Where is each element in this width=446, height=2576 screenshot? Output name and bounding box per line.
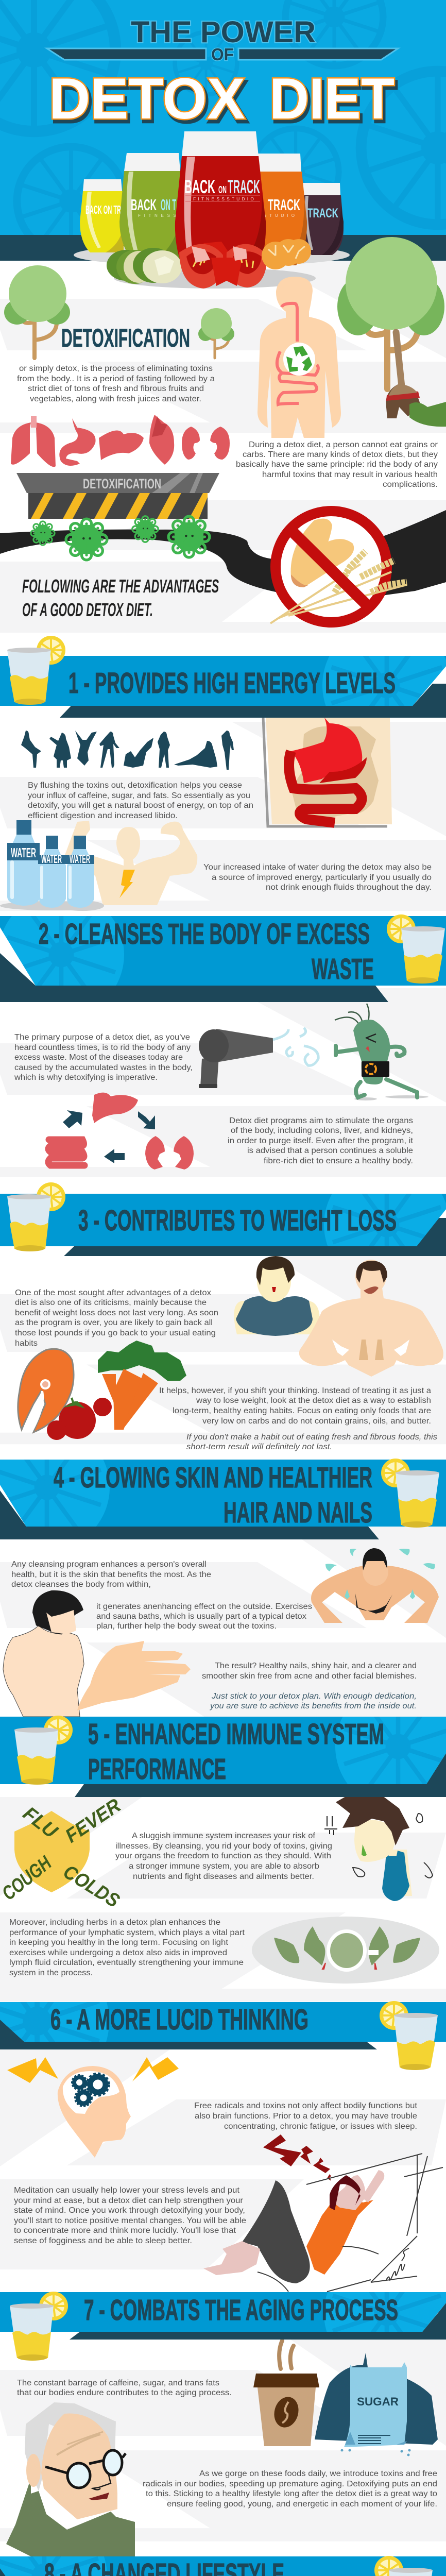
icon: left tree — [4, 265, 70, 358]
icon: recycle — [286, 346, 312, 372]
glass: red: BACK — [184, 176, 215, 197]
text: meditation: your mind at ease, but a detox diet can help strengthen your — [14, 2196, 243, 2205]
panel: section 3 content — [15, 1256, 443, 1451]
text: detox rules: During a detox diet, a person cannot eat grains or — [249, 440, 438, 449]
text: shift thinking: way to lose weight, look at the detox diet as a way to establish — [196, 1396, 431, 1405]
icon: broom — [386, 332, 446, 427]
icon: hand and nails — [77, 1641, 191, 1710]
text: flu fever cough colds: FEVER — [62, 1794, 125, 1847]
text: organs: in order to purge itself. Even after the program, it — [228, 1137, 414, 1145]
icon: healthy back and hair — [3, 1590, 84, 1717]
icon: germ — [335, 1004, 428, 1100]
text: immune system: a stronger immune system, you are able to absorb — [129, 1862, 319, 1871]
banner: 4 glowing skin — [0, 1459, 446, 1539]
text: excess waste — [14, 1033, 193, 1082]
icon: coffee cup — [253, 2341, 319, 2446]
icon: digestive panel — [263, 718, 392, 826]
text: stick to plan: Just stick to your detox plan. With enough dedication, — [211, 1692, 417, 1701]
text: detox rules: carbs. There are many kinds of detox diets, but they — [243, 450, 438, 459]
text: barrage — [17, 2379, 232, 2397]
icon: big tree — [337, 237, 444, 389]
text: water intake: a source of improved energy, particularly if you usually do — [212, 873, 432, 882]
text: herbs: exercises while undergoing a detox also aids in improved — [9, 1948, 227, 1957]
title: detox diet — [49, 66, 397, 134]
text: definition: from the body.. It is a period of fasting followed by a — [17, 375, 215, 383]
food: tomato halves — [179, 242, 267, 289]
text: organs: fibre-rich diet to ensure a healthy body. — [264, 1157, 413, 1165]
text: water intake: not drink enough fluids throughout the day. — [266, 883, 432, 892]
text: short-term result: If you don't make a habit out of eating fresh and fibrous foods, this — [186, 1433, 437, 1442]
text: immune system: A sluggish immune system increases your risk of — [132, 1832, 316, 1840]
icon: silhouettes — [21, 731, 234, 770]
icon: herbal tea — [252, 1917, 439, 1984]
glass: red: ON — [218, 184, 227, 196]
food: orange slices — [262, 239, 311, 269]
heading: detoxification: DETOXIFICATION — [61, 324, 190, 352]
text: exercises and sauna — [96, 1602, 312, 1631]
text: excess waste: which is why detoxifying is imperative. — [14, 1073, 158, 1082]
icon: muscular man — [299, 1260, 443, 1377]
glass: purple: TRACK — [307, 206, 338, 221]
text: free radicals: also brain functions. Prior to a detox, you may have trouble — [195, 2112, 417, 2121]
text: stick to plan: you are sure to achieve its benefits from the inside out. — [210, 1702, 417, 1710]
text: weight loss: habits — [15, 1339, 38, 1348]
icon: small tree — [198, 308, 234, 358]
text: herbs: Moreover, including herbs in a detox plan enhances the — [9, 1918, 220, 1927]
plate shadows — [74, 244, 350, 289]
icon: old man — [6, 2402, 135, 2556]
icon: relaxed woman — [203, 2154, 443, 2292]
banner: 1 high energy — [0, 636, 446, 718]
glass: orange: S T U D I O — [264, 213, 295, 218]
panel: header — [0, 0, 446, 289]
panel: detoxification intro — [0, 237, 446, 623]
icon: water bottles: WATER — [41, 853, 62, 866]
icon: hair dryer — [199, 1029, 273, 1088]
glass: green: F I T N E S S — [138, 213, 176, 218]
icon: liver — [92, 1093, 138, 1123]
text: stick to plan — [210, 1692, 417, 1710]
panel: section 4 content — [3, 1548, 439, 1717]
icon: sugar bag: SUGAR — [357, 2395, 399, 2408]
icon: sugar bag — [315, 2353, 438, 2456]
text: water intake: Your increased intake of water during the detox may also be — [203, 863, 432, 872]
banner: 2 cleanses: WASTE — [312, 953, 374, 986]
text: organs: is advised that a person continues a soluble — [247, 1146, 413, 1155]
icon: colon — [48, 1140, 84, 1165]
text: organs: of the body, including colons, liver, and kidneys, — [231, 1126, 413, 1135]
text: results: smoother skin free from acne and other facial blemishes. — [202, 1672, 417, 1681]
text: barrage: The constant barrage of caffeine, sugar, and trans fats — [17, 2379, 219, 2387]
text: meditation: state of mind. Once you work through detoxifying your body, — [14, 2206, 245, 2215]
icon: shield — [14, 1811, 90, 1892]
text: weight loss: as the program is over, you are likely to gain back all — [15, 1318, 213, 1327]
panel: section 5 content — [0, 1793, 439, 1984]
text: flu fever cough colds: COLDS — [59, 1861, 123, 1912]
text: flushing toxins: your influx of caffeine, sugar, and fats. So essentially as you — [28, 791, 250, 800]
text: skin benefits: Any cleansing program enhances a person's overall — [11, 1560, 207, 1569]
banner: 5 immune system — [0, 1716, 446, 1797]
title: the power of — [47, 15, 398, 64]
glass: red: TRACK — [228, 176, 260, 197]
text: weight loss: One of the most sought after advantages of a detox — [15, 1289, 211, 1297]
text: advantages: FOLLOWING ARE THE ADVANTAGES — [22, 575, 219, 597]
text: excess waste: excess waste. Most of the diseases today are — [14, 1053, 183, 1062]
text: advantages — [22, 575, 219, 620]
text: meditation: Meditation can usually help lower your stress levels and put — [14, 2186, 240, 2195]
text: flu fever cough colds — [0, 1794, 125, 1912]
text: excess waste: caused by the accumulated wastes in the body, — [14, 1063, 193, 1072]
text: results: The result? Healthy nails, shiny hair, and a clearer and — [215, 1662, 417, 1670]
text: flu fever cough colds: FLU — [19, 1803, 62, 1843]
panel: section 6 content — [7, 2057, 443, 2292]
banner: 6 lucid thinking: 6 - A MORE LUCID THINKING — [50, 2003, 308, 2036]
glass: green: BACK — [131, 196, 157, 214]
text: herbs: system in the process. — [9, 1969, 93, 1977]
text: skin benefits — [11, 1560, 211, 1589]
text: water intake — [203, 863, 432, 892]
icon: no bread and grains — [270, 511, 407, 623]
glass: green: ON T — [161, 196, 176, 214]
icon: lightning bolts — [7, 2057, 179, 2083]
text: free radicals — [194, 2102, 418, 2131]
text: weight loss: benefit of weight loss does not last very long. As soon — [15, 1309, 218, 1317]
panel: section 2 content — [14, 1004, 428, 1170]
icon: viruses — [33, 518, 206, 556]
text: immune system: your organs the freedom to function as they should. With — [115, 1852, 331, 1860]
icon: digestive body — [258, 277, 341, 438]
icon: kidneys — [145, 1136, 194, 1170]
icon: water bottles: WATER — [70, 853, 90, 866]
glass: yellow: BACK ON TR — [85, 203, 121, 216]
text: flushing toxins — [28, 781, 253, 820]
text: exercises and sauna: and sauna baths, which is usually part of a typical detox — [96, 1612, 306, 1621]
text: shift thinking: long-term, healthy eating habits. Focus on eating only foods that are — [173, 1406, 431, 1415]
text: free radicals: concentrating, chronic fatigue, or issues with sleep. — [224, 2122, 417, 2131]
text: weight loss: diet is also one of its criticisms, mainly because the — [15, 1298, 207, 1307]
text: herbs: in keeping you healthy in the long term. Focusing on light — [9, 1938, 229, 1947]
panel: section 7 content — [6, 2341, 438, 2556]
panel: section 1 content — [0, 718, 432, 911]
title: detox diet: DETOX — [49, 66, 245, 131]
glass: orange — [258, 154, 307, 265]
text: advantages: OF A GOOD DETOX DIET. — [22, 599, 153, 620]
text: definition: vegetables, along with fresh juices and water. — [30, 395, 201, 403]
text: gorge: As we gorge on these foods daily, we introduce toxins and free — [199, 2469, 437, 2478]
text: weight loss — [15, 1289, 218, 1348]
text: immune system: illnesses. By cleansing, you rid your body of toxins, giving — [115, 1842, 332, 1851]
text: free radicals: Free radicals and toxins not only affect bodily functions but — [194, 2102, 418, 2110]
text: exercises and sauna: plan, further help the body sweat out the toxins. — [96, 1622, 277, 1631]
text: meditation — [14, 2186, 246, 2245]
icon: overweight man — [234, 1256, 320, 1336]
title: the power of: THE POWER — [131, 15, 316, 49]
text: herbs: lymph fluid circulation, eventually strengthening your immune — [9, 1958, 244, 1967]
text: skin benefits: detox cleanses the body from within, — [11, 1580, 151, 1589]
icon: organs — [11, 415, 230, 467]
text: meditation: to concentrate more and think more lucidly. You'll lose that — [14, 2226, 236, 2235]
icon: salmon — [18, 1349, 74, 1432]
text: shift thinking: very low on carbs and do not contain grains, oils, and butter. — [202, 1417, 431, 1426]
icon: wind swirls — [273, 1028, 318, 1065]
icon: tomatoes — [47, 1398, 112, 1440]
text: detox rules — [236, 440, 438, 489]
text: results — [202, 1662, 417, 1681]
icon: sick man — [324, 1793, 433, 1901]
text: flu fever cough colds: COUGH — [0, 1852, 56, 1905]
glass: red: F I T N E S S S T U D I O — [193, 196, 254, 201]
text: excess waste: The primary purpose of a detox diet, as you've — [14, 1033, 190, 1042]
text: definition: or simply detox, is the process of eliminating toxins — [19, 364, 213, 373]
icon: water bottles: WATER — [11, 845, 36, 860]
text: flushing toxins: efficient digestion and increased libido. — [28, 811, 178, 820]
icon: sleep z letters — [263, 2134, 331, 2181]
text: flushing toxins: detoxify, you will get a natural boost of energy, on top of an — [28, 801, 253, 810]
title: detox diet: DETOX — [51, 70, 247, 134]
text: gorge — [143, 2469, 437, 2509]
banner: 5 immune system: PERFORMANCE — [88, 1753, 226, 1786]
text: gorge: to this. Sticking to a healthy lifestyle long after the detox diet is a great way to — [146, 2489, 437, 2498]
text: flushing toxins: By flushing the toxins out, detoxification helps you cease — [28, 781, 242, 790]
text: excess waste: heard countless times, is to rid the body of any — [14, 1043, 191, 1052]
text: meditation: sense of fogginess and be able to sleep better. — [14, 2236, 192, 2245]
glass: green — [119, 153, 181, 260]
glass: yellow — [80, 179, 124, 252]
icon: man doing pushup — [311, 1548, 439, 1623]
text: gorge: ensure feeling good, young, and energetic in each moment of your life. — [167, 2500, 437, 2509]
text: herbs: performance of your lymphatic system, which plays a vital part — [9, 1928, 245, 1937]
icon: detox machine — [16, 473, 219, 519]
title: detox diet: DIET — [271, 70, 397, 134]
title: the power of: OF — [211, 45, 234, 64]
icon: broccoli — [98, 1341, 186, 1381]
text: detox rules: harmful toxins that may result in various health — [262, 470, 438, 479]
icon: water bottles — [0, 820, 104, 911]
glass: purple — [303, 183, 344, 255]
banner: 7 aging — [0, 2292, 446, 2361]
text: meditation: you'll start to notice positive mental changes. You will be able — [14, 2216, 246, 2225]
glass: red — [175, 131, 266, 281]
icon: black road — [0, 510, 446, 603]
icon: muscle man — [63, 821, 197, 905]
text: detox rules: basically have the same principle: rid the body of any — [236, 460, 438, 469]
icon: carrots — [102, 1369, 158, 1430]
banner: 2 cleanses — [0, 914, 446, 1002]
banner: 3 weight loss — [0, 1182, 446, 1256]
text: organs: Detox diet programs aim to stimulate the organs — [229, 1116, 413, 1125]
food: cucumber slices — [107, 248, 182, 284]
text: exercises and sauna: it generates anenhancing effect on the outside. Exercises — [96, 1602, 312, 1611]
glass: orange: TRACK — [268, 196, 300, 214]
title: detox diet: DIET — [269, 66, 394, 131]
text: immune system: nutrients and fight diseases and ailments better. — [133, 1872, 314, 1881]
text: shift thinking — [159, 1386, 431, 1426]
text: short-term result: short-term result will definitely not last. — [186, 1443, 332, 1451]
text: organs — [228, 1116, 414, 1165]
text: definition: strict diet of tons of fresh and fibrous fruits and — [28, 384, 204, 393]
icon: head with gears — [58, 2066, 131, 2158]
icon: detox machine: DETOXIFICATION — [83, 476, 161, 492]
text: herbs — [9, 1918, 245, 1977]
text: barrage: that our bodies endure contributes to the aging process. — [17, 2388, 232, 2397]
banner: 6 lucid thinking — [0, 2001, 446, 2070]
text: weight loss: those lost pounds if you go back to your usual eating — [15, 1329, 216, 1337]
text: detox rules: complications. — [383, 480, 438, 489]
text: short-term result — [186, 1433, 437, 1451]
text: gorge: radicals in our bodies, speeding up premature aging. Detoxifying puts an end — [143, 2480, 437, 2488]
icon: cycle arrows — [63, 1110, 155, 1163]
text: skin benefits: health, but it is the skin that benefits the most. As the — [11, 1570, 211, 1579]
text: shift thinking: It helps, however, if you shift your thinking. Instead of treating it as just a — [159, 1386, 431, 1395]
text: immune system — [115, 1832, 332, 1881]
text: definition — [17, 364, 215, 403]
